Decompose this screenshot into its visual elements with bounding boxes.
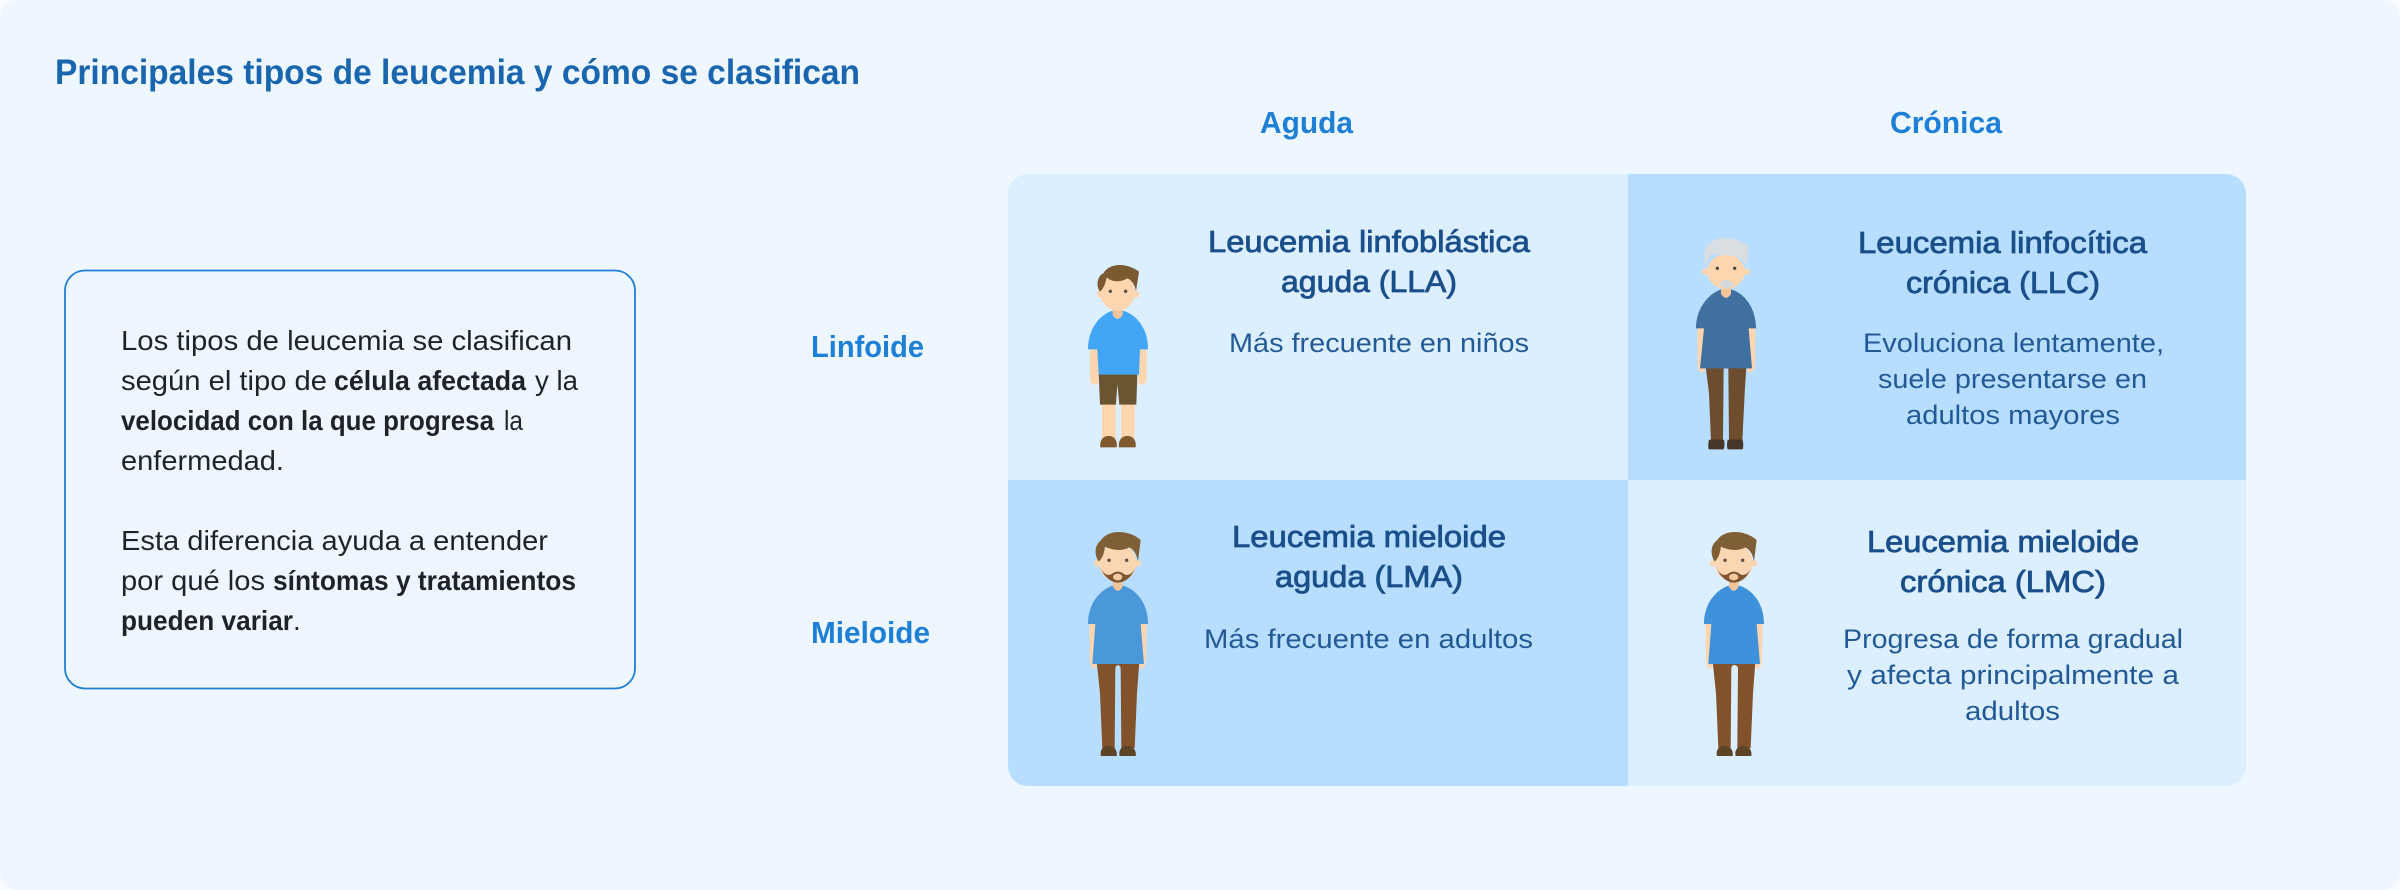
text block: importance: pueden variar xyxy=(121,605,293,636)
panel: LMA xyxy=(1008,480,1628,786)
text block: importance: por qué los xyxy=(121,565,265,596)
text block: classification: velocidad con la que progresa xyxy=(121,405,494,436)
column heading: Crónica: Crónica xyxy=(1890,105,2003,140)
text block: classification xyxy=(121,325,578,476)
panel: introductory text xyxy=(65,270,635,688)
text: LLC: Leucemia linfocítica xyxy=(1858,225,2148,260)
text: LMA: Más frecuente en adultos xyxy=(1204,624,1533,654)
icon: adult man xyxy=(1704,532,1764,756)
text: LMC: Leucemia mieloide xyxy=(1867,524,2139,559)
row heading: Mieloide: Mieloide xyxy=(811,615,930,650)
text block: classification: la xyxy=(504,405,523,436)
text: LLC: adultos mayores xyxy=(1906,400,2120,430)
text: LMC: crónica (LMC) xyxy=(1900,564,2106,599)
text: LMC xyxy=(1843,524,2183,726)
text: LLA: Leucemia linfoblástica xyxy=(1208,224,1531,259)
text: LLA xyxy=(1208,224,1531,358)
text: LMC: adultos xyxy=(1965,696,2060,726)
text: LMA xyxy=(1204,519,1533,654)
text: LLC: Evoluciona lentamente, xyxy=(1863,328,2164,358)
icon: adult man xyxy=(1088,532,1148,756)
text: LLC xyxy=(1858,225,2164,430)
text block: classification: célula afectada xyxy=(334,365,526,396)
text block: classification: según el tipo de xyxy=(121,365,327,396)
icon: older man xyxy=(1696,238,1756,449)
text block: importance: síntomas y tratamientos xyxy=(273,565,576,596)
text: LLC: crónica (LLC) xyxy=(1906,265,2100,300)
text block: importance: Esta diferencia ayuda a entender xyxy=(121,525,548,556)
row heading: Linfoide: Linfoide xyxy=(811,329,924,364)
text: LMA: aguda (LMA) xyxy=(1275,559,1463,594)
text: LMA: Leucemia mieloide xyxy=(1232,519,1506,554)
text: LLA: Más frecuente en niños xyxy=(1229,328,1529,358)
text block: importance xyxy=(121,525,576,636)
text block: classification: y la xyxy=(535,365,578,396)
title: Principales tipos de leucemia y cómo se clasifican xyxy=(55,53,860,92)
text: LLA: aguda (LLA) xyxy=(1281,264,1457,299)
text: LLC: suele presentarse en xyxy=(1878,364,2147,394)
panel: LLA xyxy=(1008,174,1628,480)
panel: LLC xyxy=(1628,174,2246,480)
text block: classification: enfermedad. xyxy=(121,445,284,476)
text block: classification: Los tipos de leucemia se clasifican xyxy=(121,325,572,356)
text: LMC: Progresa de forma gradual xyxy=(1843,624,2183,654)
text: LMC: y afecta principalmente a xyxy=(1847,660,2180,690)
text block: importance: . xyxy=(293,605,301,636)
panel: LMC xyxy=(1628,480,2246,786)
icon: child xyxy=(1088,265,1148,447)
column heading: Aguda: Aguda xyxy=(1260,105,1354,140)
